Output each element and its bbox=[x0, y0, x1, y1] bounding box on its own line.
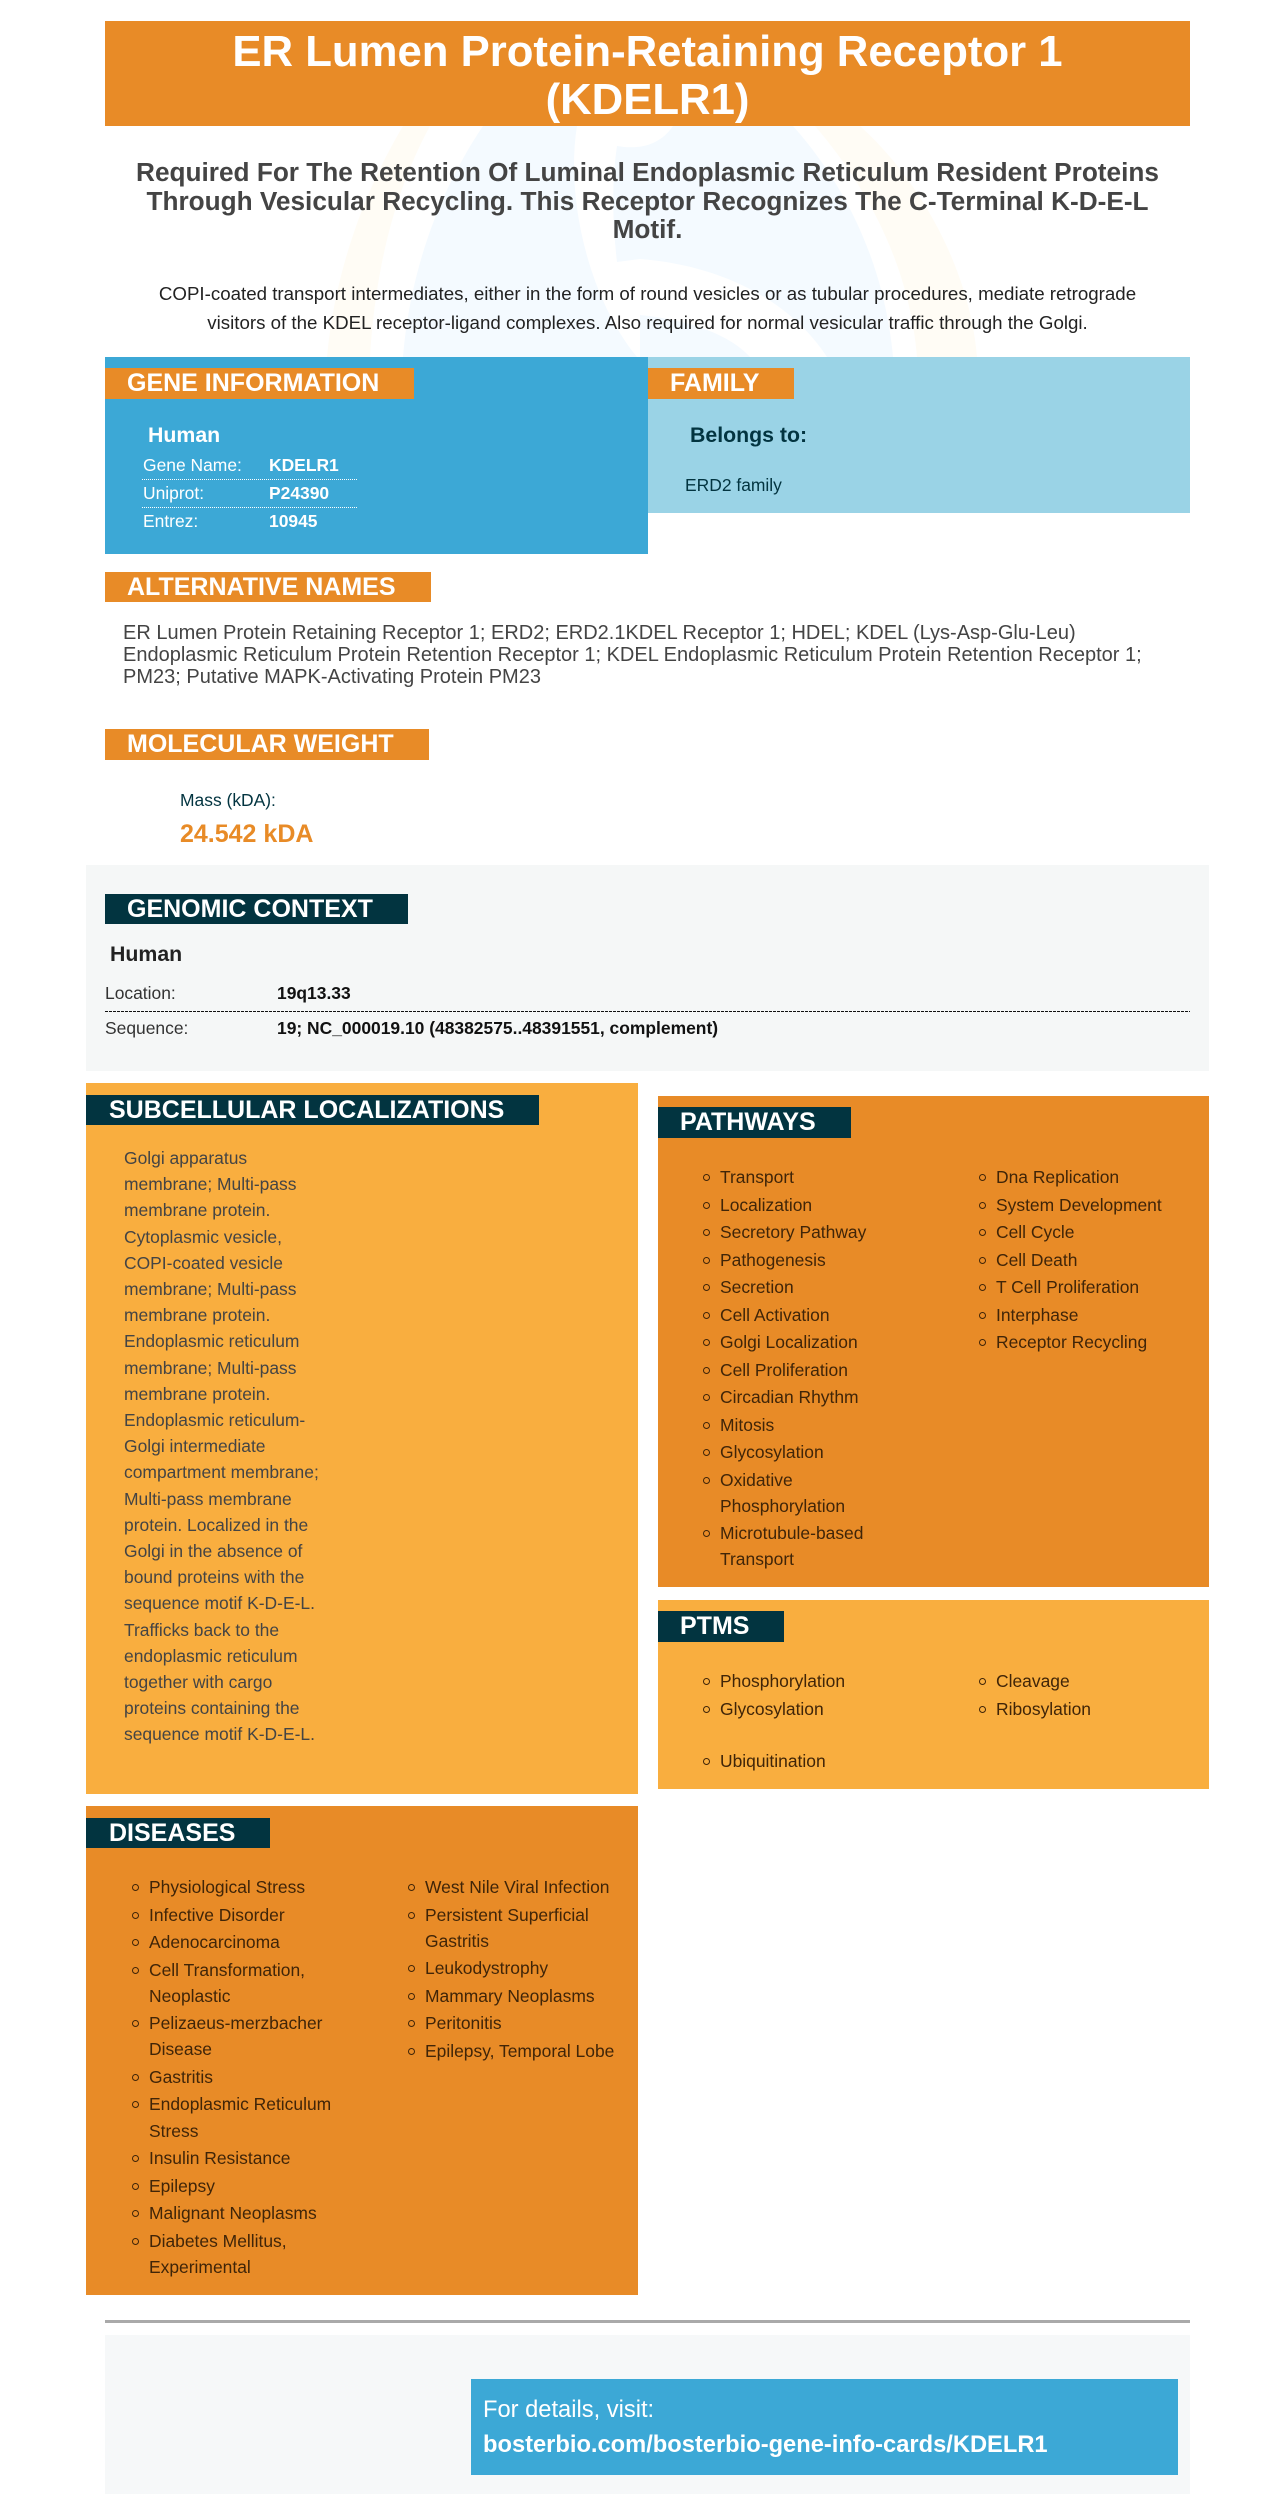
location row: 19q13.33 bbox=[277, 983, 351, 1003]
localization text: proteins containing the bbox=[124, 1698, 299, 1718]
localization text: Cytoplasmic vesicle, bbox=[124, 1227, 282, 1247]
species label: Human bbox=[148, 423, 220, 447]
pathways list column 2: T Cell Proliferation bbox=[996, 1277, 1139, 1297]
diseases list column 1: Malignant Neoplasms bbox=[149, 2203, 317, 2223]
ptms list column 1: Phosphorylation bbox=[720, 1671, 845, 1691]
ptms list column 1: Glycosylation bbox=[720, 1698, 824, 1718]
heading: subcellular localizations: SUBCELLULAR LOCALIZATIONS bbox=[109, 1096, 504, 1124]
ptms list column 2 bbox=[979, 1671, 1091, 1718]
pathways list column 1: Transport bbox=[720, 1549, 794, 1569]
alternative names text: ER Lumen Protein Retaining Receptor 1; ERD2; ERD2.1KDEL Receptor 1; HDEL; KDEL (Lys-Asp-Glu-Leu) bbox=[123, 622, 1076, 644]
title banner bbox=[105, 21, 1190, 126]
pathways list column 1: Microtubule-based bbox=[720, 1523, 863, 1543]
heading: ptms bbox=[658, 1611, 784, 1642]
uniprot row: Uniprot: bbox=[143, 483, 204, 503]
pathways list column 1: Golgi Localization bbox=[720, 1332, 858, 1352]
pathways list column 1: Cell Activation bbox=[720, 1304, 830, 1324]
gene name row: Gene Name: bbox=[143, 455, 242, 475]
heading: genomic context: GENOMIC CONTEXT bbox=[127, 895, 373, 923]
species label: Human bbox=[110, 942, 182, 966]
diseases list column 2: Mammary Neoplasms bbox=[425, 1986, 595, 2006]
panel: genomic context bbox=[86, 865, 1209, 1071]
diseases list column 1: Neoplastic bbox=[149, 1986, 230, 2006]
diseases list column 2: Gastritis bbox=[425, 1931, 489, 1951]
pathways list column 2: Cell Death bbox=[996, 1250, 1077, 1270]
localization text: Multi-pass membrane bbox=[124, 1489, 292, 1509]
title banner: ER Lumen Protein-Retaining Receptor 1 bbox=[232, 27, 1063, 76]
localization text: membrane protein. bbox=[124, 1305, 270, 1325]
subtitle bbox=[136, 157, 1159, 244]
diseases list column 2: Leukodystrophy bbox=[425, 1958, 548, 1978]
diseases list column 2: Epilepsy, Temporal Lobe bbox=[425, 2041, 614, 2061]
diseases list column 1: Insulin Resistance bbox=[149, 2148, 291, 2168]
ptms list column 2: Ribosylation bbox=[996, 1698, 1091, 1718]
pathways list column 1 bbox=[703, 1167, 866, 1569]
heading: diseases: DISEASES bbox=[109, 1819, 235, 1847]
pathways list column 1: Mitosis bbox=[720, 1414, 774, 1434]
localization text: bound proteins with the bbox=[124, 1567, 304, 1587]
subtitle: Required For The Retention Of Luminal Endoplasmic Reticulum Resident Proteins bbox=[136, 157, 1159, 187]
pathways list column 1: Pathogenesis bbox=[720, 1250, 826, 1270]
description: visitors of the KDEL receptor-ligand complexes. Also required for normal vesicular traffic through the Golgi. bbox=[207, 312, 1088, 333]
diseases list column 1: Infective Disorder bbox=[149, 1904, 285, 1924]
diseases list column 1: Adenocarcinoma bbox=[149, 1932, 280, 1952]
diseases list column 1: Disease bbox=[149, 2039, 212, 2059]
localization text: membrane protein. bbox=[124, 1200, 270, 1220]
belongs to label: Belongs to: bbox=[690, 423, 807, 447]
ptms list column 1 bbox=[703, 1671, 845, 1771]
localization text: membrane; Multi-pass bbox=[124, 1174, 296, 1194]
diseases list column 1: Cell Transformation, bbox=[149, 1960, 305, 1980]
pathways list column 1: Secretion bbox=[720, 1277, 794, 1297]
alternative names text: Endoplasmic Reticulum Protein Retention Receptor 1; KDEL Endoplasmic Reticulum Protein Retention Receptor 1; bbox=[123, 644, 1142, 666]
localization text: Endoplasmic reticulum- bbox=[124, 1410, 305, 1430]
heading: pathways bbox=[658, 1107, 851, 1138]
entrez row: 10945 bbox=[269, 511, 318, 531]
heading: family: FAMILY bbox=[670, 369, 759, 397]
pathways list column 1: Oxidative bbox=[720, 1470, 793, 1490]
gene name row: KDELR1 bbox=[269, 455, 339, 475]
panel: ptms bbox=[658, 1600, 1209, 1789]
localization text: COPI-coated vesicle bbox=[124, 1253, 283, 1273]
pathways list column 1: Glycosylation bbox=[720, 1442, 824, 1462]
pathways list column 1: Transport bbox=[720, 1167, 794, 1187]
pathways list column 1: Secretory Pathway bbox=[720, 1222, 866, 1242]
diseases list column 1: Endoplasmic Reticulum bbox=[149, 2094, 331, 2114]
alternative names text: PM23; Putative MAPK-Activating Protein PM23 bbox=[123, 666, 541, 688]
sequence row: 19; NC_000019.10 (48382575..48391551, complement) bbox=[277, 1018, 718, 1038]
pathways list column 2: Cell Cycle bbox=[996, 1222, 1074, 1242]
localization text: compartment membrane; bbox=[124, 1462, 319, 1482]
mass value: 24.542 kDA bbox=[180, 820, 313, 848]
diseases list column 1: Experimental bbox=[149, 2257, 251, 2277]
diseases list column 2: West Nile Viral Infection bbox=[425, 1877, 609, 1897]
diseases list column 1: Epilepsy bbox=[149, 2176, 215, 2196]
location row: Location: bbox=[105, 983, 176, 1003]
entrez row bbox=[143, 511, 318, 531]
ptms list column 2: Cleavage bbox=[996, 1671, 1070, 1691]
ptms list column 1: Ubiquitination bbox=[720, 1751, 826, 1771]
pathways list column 1: Circadian Rhythm bbox=[720, 1387, 859, 1407]
localization text: together with cargo bbox=[124, 1672, 272, 1692]
localization text: Trafficks back to the bbox=[124, 1620, 279, 1640]
localization text: membrane; Multi-pass bbox=[124, 1358, 296, 1378]
localization text: protein. Localized in the bbox=[124, 1515, 308, 1535]
gene name row bbox=[142, 451, 357, 480]
pathways list column 2: System Development bbox=[996, 1194, 1162, 1214]
pathways list column 2: Interphase bbox=[996, 1304, 1078, 1324]
localization text: Golgi apparatus bbox=[124, 1148, 247, 1168]
sequence row: Sequence: bbox=[105, 1018, 188, 1038]
panel: footer bbox=[105, 2335, 1190, 2494]
localization text: membrane protein. bbox=[124, 1384, 270, 1404]
background logo watermark bbox=[327, 126, 977, 357]
heading: pathways: PATHWAYS bbox=[680, 1108, 816, 1136]
pathways list column 1: Phosphorylation bbox=[720, 1496, 845, 1516]
localization text: membrane; Multi-pass bbox=[124, 1279, 296, 1299]
description bbox=[159, 283, 1136, 333]
description: COPI-coated transport intermediates, either in the form of round vesicles or as tubular procedures, mediate retrograde bbox=[159, 283, 1136, 304]
localization text: Golgi intermediate bbox=[124, 1436, 266, 1456]
diseases list column 2: Persistent Superficial bbox=[425, 1904, 589, 1924]
localization text: endoplasmic reticulum bbox=[124, 1646, 297, 1666]
diseases list column 1: Physiological Stress bbox=[149, 1877, 305, 1897]
diseases list column 1: Diabetes Mellitus, bbox=[149, 2231, 287, 2251]
panel: subcellular localizations bbox=[86, 1083, 638, 1794]
heading: family bbox=[648, 368, 794, 399]
title banner: (KDELR1) bbox=[546, 75, 749, 124]
panel: diseases bbox=[86, 1806, 638, 2295]
heading: molecular weight: MOLECULAR WEIGHT bbox=[127, 730, 394, 758]
heading: gene information: GENE INFORMATION bbox=[127, 369, 379, 397]
localization text: sequence motif K-D-E-L. bbox=[124, 1724, 315, 1744]
diseases list column 1 bbox=[132, 1877, 331, 2277]
mass label: Mass (kDA): bbox=[180, 790, 276, 810]
heading: diseases bbox=[86, 1818, 270, 1848]
localization text bbox=[124, 1148, 319, 1744]
panel: family bbox=[648, 357, 1190, 513]
family value: ERD2 family bbox=[685, 475, 782, 495]
entrez row: Entrez: bbox=[143, 511, 198, 531]
pathways list column 1: Localization bbox=[720, 1194, 812, 1214]
localization text: Golgi in the absence of bbox=[124, 1541, 302, 1561]
callout: details link: bosterbio.com/bosterbio-gene-info-cards/KDELR1 bbox=[483, 2432, 1048, 2458]
localization text: Endoplasmic reticulum bbox=[124, 1331, 299, 1351]
pathways list column 2: Dna Replication bbox=[996, 1167, 1119, 1187]
pathways list column 2: Receptor Recycling bbox=[996, 1332, 1147, 1352]
uniprot row bbox=[142, 479, 357, 508]
diseases list column 1: Stress bbox=[149, 2121, 198, 2141]
location row bbox=[105, 979, 1190, 1012]
callout: details link bbox=[471, 2379, 1178, 2475]
subtitle: Through Vesicular Recycling. This Receptor Recognizes The C-Terminal K-D-E-L bbox=[146, 186, 1149, 216]
pathways list column 1: Cell Proliferation bbox=[720, 1360, 848, 1380]
alternative names text bbox=[123, 622, 1142, 688]
heading: ptms: PTMS bbox=[680, 1612, 749, 1640]
heading: alternative names: ALTERNATIVE NAMES bbox=[127, 573, 396, 601]
panel: pathways bbox=[658, 1096, 1209, 1587]
diseases list column 2: Peritonitis bbox=[425, 2013, 502, 2033]
pathways list column 2 bbox=[979, 1167, 1162, 1352]
localization text: sequence motif K-D-E-L. bbox=[124, 1593, 315, 1613]
diseases list column 1: Gastritis bbox=[149, 2067, 213, 2087]
diseases list column 1: Pelizaeus-merzbacher bbox=[149, 2013, 322, 2033]
subtitle: Motif. bbox=[613, 214, 682, 244]
panel: gene information bbox=[105, 357, 648, 554]
callout: details link: For details, visit: bbox=[483, 2397, 654, 2423]
uniprot row: P24390 bbox=[269, 483, 329, 503]
diseases list column 2 bbox=[408, 1877, 614, 2061]
